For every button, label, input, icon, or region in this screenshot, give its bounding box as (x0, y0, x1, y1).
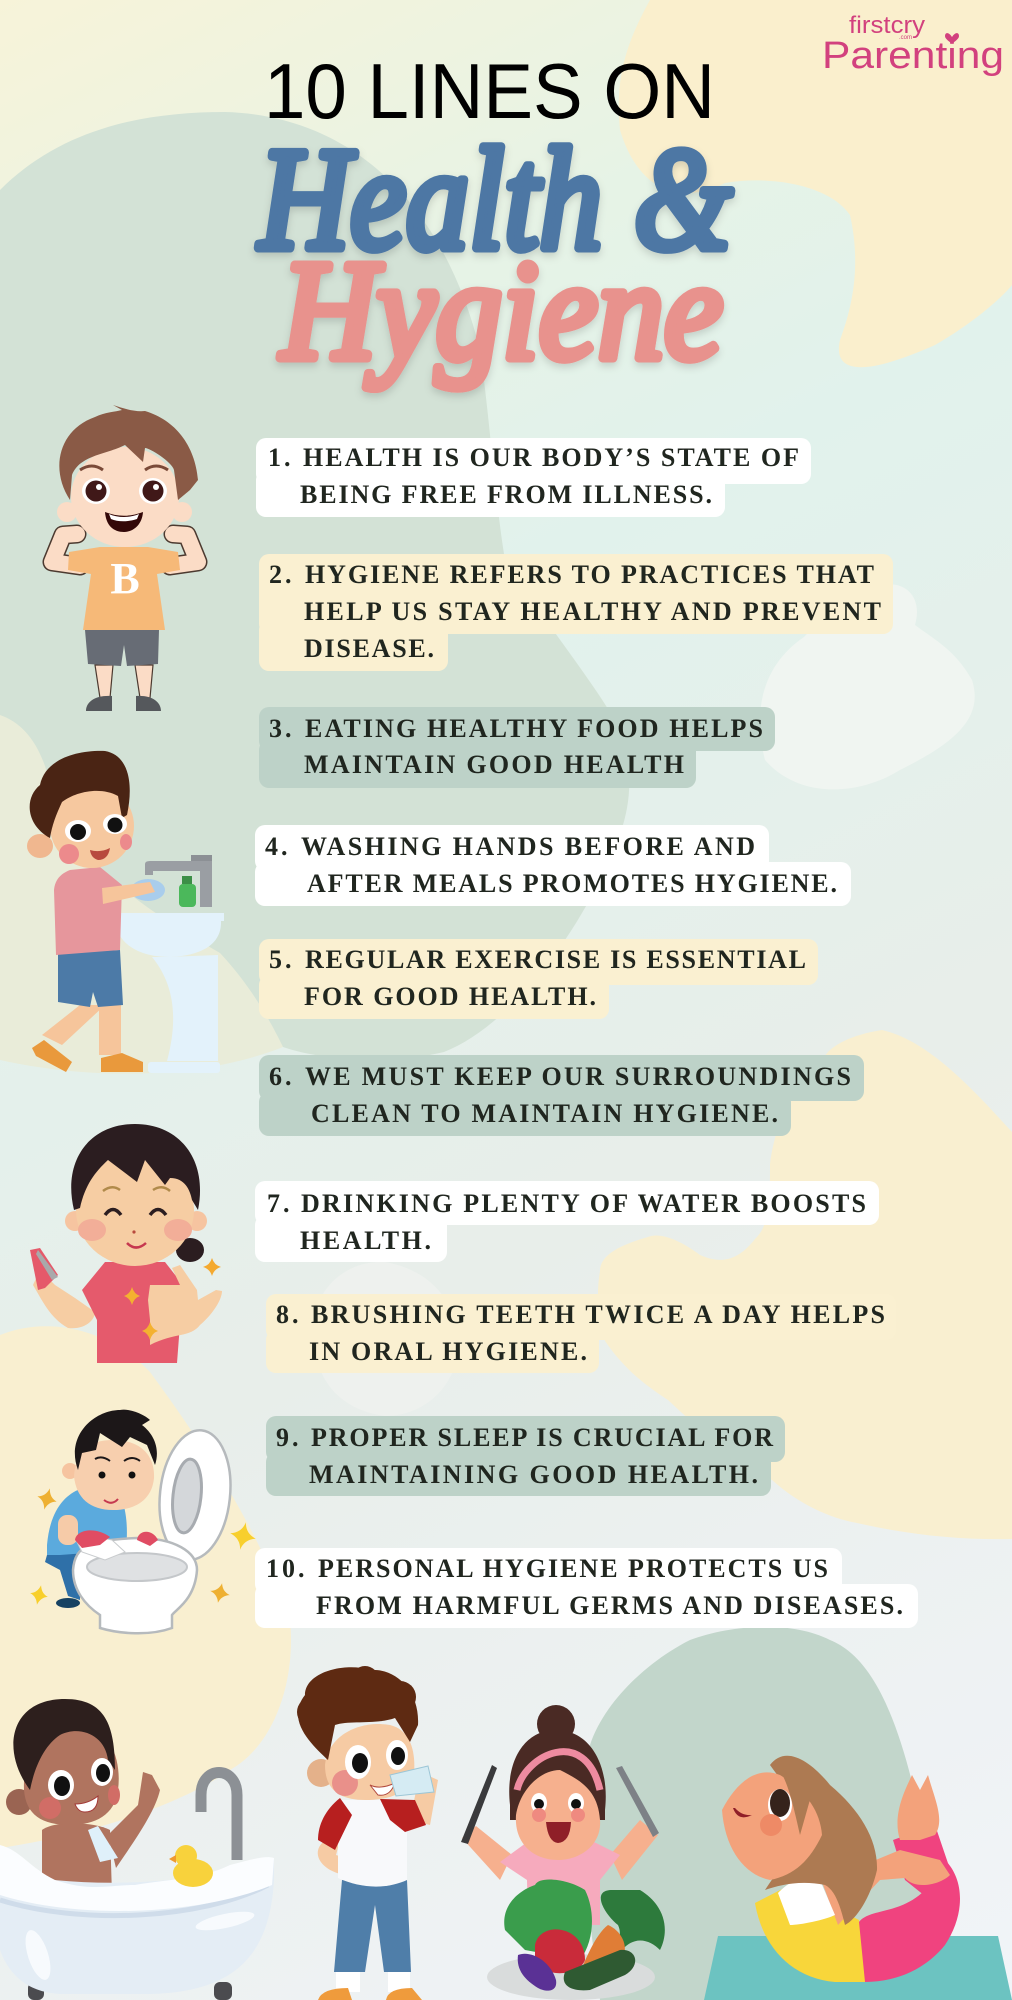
illustration: boy drinking water (297, 1666, 438, 2000)
line 10: PERSONAL HYGIENE PROTECTS US (318, 1554, 828, 1583)
line 3: EATING HEALTHY FOOD HELPS (305, 714, 763, 743)
line 6: 6. (269, 1062, 294, 1091)
illustration: boy in bathtub (0, 1699, 274, 2000)
line 1: 1. (268, 443, 294, 472)
illustration: girl doing yoga on mat (704, 1756, 1012, 2000)
illustration: boy washing hands (27, 751, 224, 1073)
logo: FirstCry Parenting: firstcry (849, 12, 925, 39)
line 6 (259, 1055, 864, 1136)
illustration: girl with vegetables (461, 1705, 665, 2000)
logo: FirstCry Parenting (822, 12, 1004, 77)
logo: FirstCry Parenting: Parenting (822, 35, 1004, 77)
line 3 (259, 707, 775, 788)
line 7: DRINKING PLENTY OF WATER BOOSTS (301, 1189, 866, 1218)
line 4 (255, 825, 851, 906)
line 5: 5. (269, 945, 294, 974)
line 4: AFTER MEALS PROMOTES HYGIENE. (307, 869, 837, 898)
line 6: CLEAN TO MAINTAIN HYGIENE. (311, 1099, 778, 1128)
line 2 (259, 554, 893, 671)
line 8: IN ORAL HYGIENE. (309, 1337, 587, 1366)
line 2: DISEASE. (304, 634, 434, 663)
line 5: REGULAR EXERCISE IS ESSENTIAL (305, 945, 806, 974)
illustration: boy flexing muscles (52, 405, 198, 711)
title: 10 LINES ON: 10 LINES ON (264, 47, 715, 135)
line 5 (259, 939, 818, 1019)
line 8: 8. (276, 1300, 302, 1329)
logo: FirstCry Parenting: .com (899, 35, 912, 41)
line 3: 3. (269, 714, 294, 743)
illustration: boy flexing muscles: B (110, 554, 140, 603)
illustration: boy cleaning toilet (28, 1410, 259, 1633)
line 10: FROM HARMFUL GERMS AND DISEASES. (316, 1591, 903, 1620)
line 4: 4. (265, 832, 290, 861)
line 1: HEALTH IS OUR BODY’S STATE OF (303, 443, 799, 472)
line 7: HEALTH. (300, 1226, 431, 1255)
line 8: BRUSHING TEETH TWICE A DAY HELPS (311, 1300, 885, 1329)
heading: Hygiene: Hygiene (279, 231, 723, 389)
heading: Health &: Health & (257, 118, 732, 280)
line 10: 10. (266, 1554, 308, 1583)
line 1 (256, 438, 811, 517)
line 6: WE MUST KEEP OUR SURROUNDINGS (305, 1062, 851, 1091)
line 2: 2. (269, 560, 294, 589)
line 9: MAINTAINING GOOD HEALTH. (309, 1460, 758, 1489)
line 1: BEING FREE FROM ILLNESS. (300, 480, 712, 509)
line 9 (266, 1416, 785, 1496)
line 7 (255, 1181, 879, 1262)
line 2: HYGIENE REFERS TO PRACTICES THAT (305, 560, 874, 589)
line 8 (266, 1294, 896, 1373)
line 10 (255, 1548, 918, 1628)
line 2: HELP US STAY HEALTHY AND PREVENT (304, 597, 881, 626)
line 3: MAINTAIN GOOD HEALTH (304, 750, 684, 779)
line 4: WASHING HANDS BEFORE AND (301, 832, 755, 861)
illustration: girl with nail clipper (30, 1124, 222, 1363)
line 7: 7. (267, 1189, 292, 1218)
line 5: FOR GOOD HEALTH. (304, 982, 596, 1011)
line 9: PROPER SLEEP IS CRUCIAL FOR (311, 1423, 773, 1452)
line 9: 9. (276, 1423, 302, 1452)
